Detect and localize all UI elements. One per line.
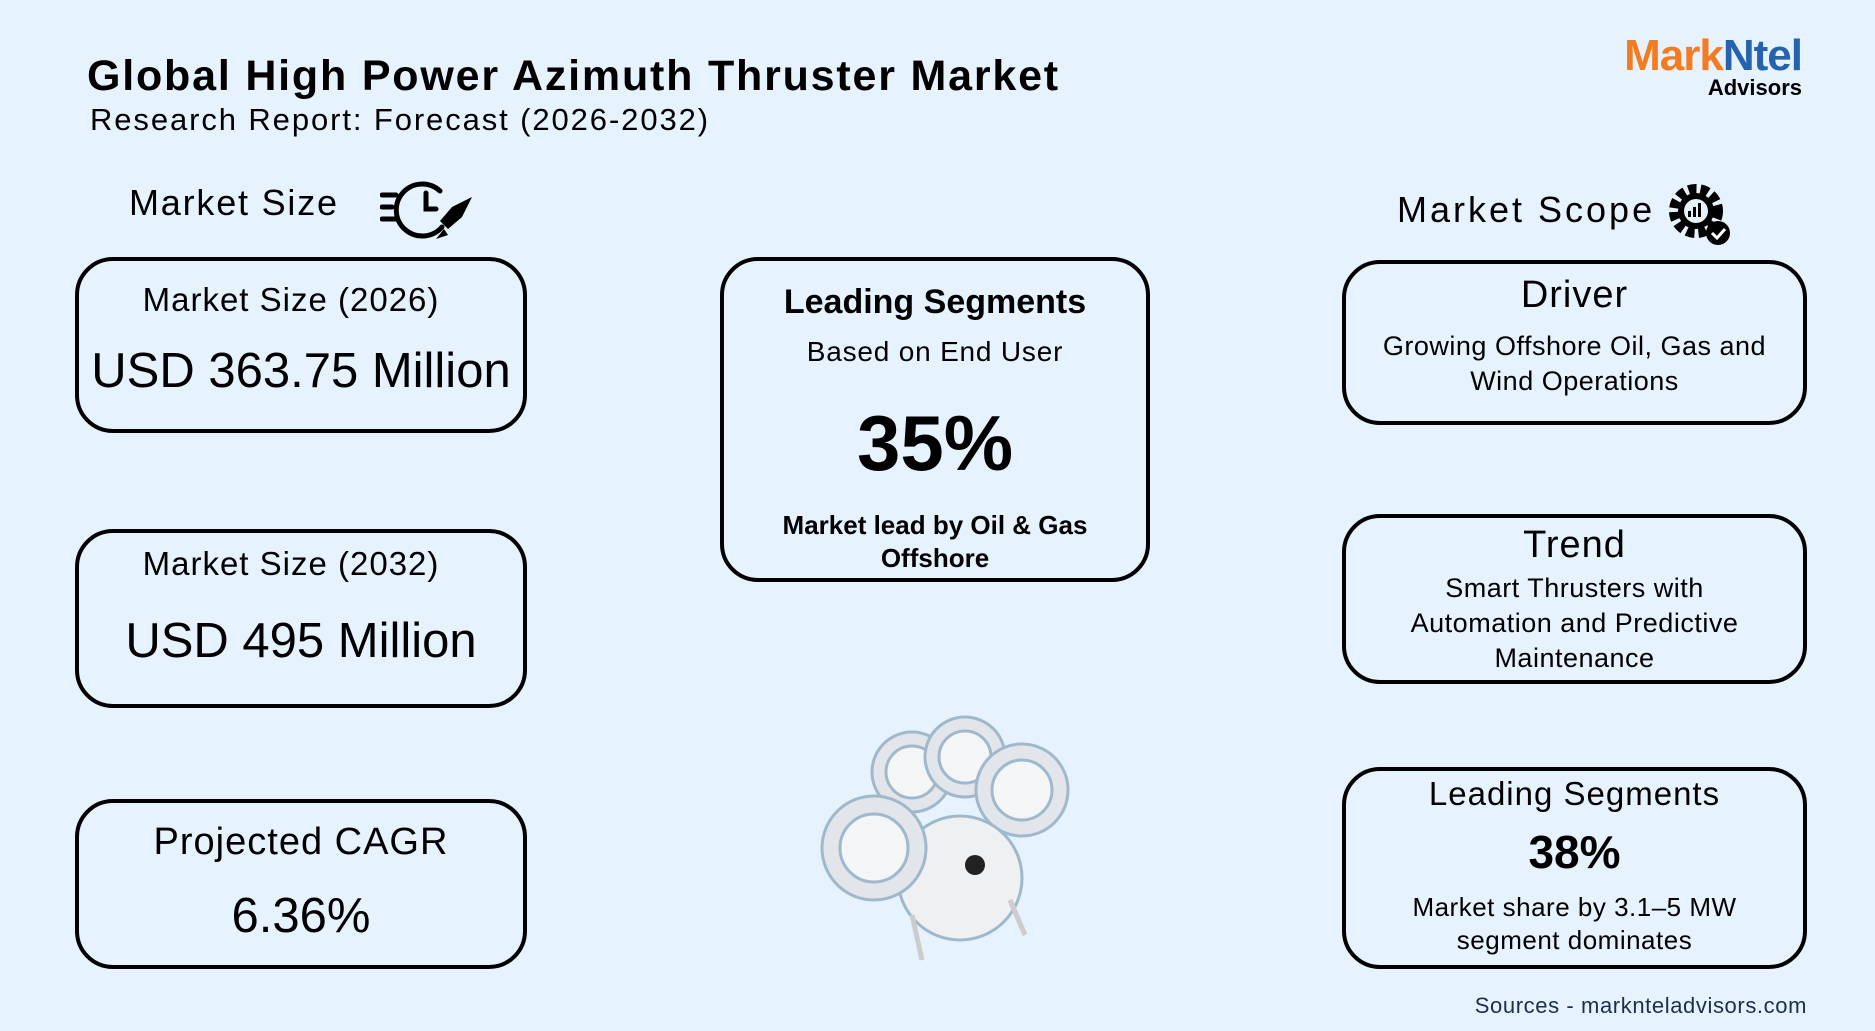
panel: trend: [1342, 514, 1807, 684]
panel: projected CAGR: 6.36%: [232, 889, 370, 943]
panel: leading segments right: Market share by 3.1–5 MW: [1412, 892, 1737, 922]
illustration: thruster: [820, 716, 1070, 960]
logo: MarkNtel: [1624, 31, 1802, 80]
panel: leading segments right: Leading Segments: [1429, 775, 1720, 812]
panel: leading segments right: 38%: [1528, 826, 1621, 878]
panel: market size 2026: USD 363.75 Million: [91, 344, 511, 398]
panel: market size 2032: [75, 529, 527, 708]
logo: Advisors: [1708, 75, 1802, 100]
panel: trend: Automation and Predictive: [1411, 608, 1738, 638]
panel: leading segments center: Based on End User: [807, 336, 1063, 367]
panel: leading segments right: [1342, 767, 1807, 969]
panel: trend: Smart Thrusters with: [1445, 573, 1704, 603]
panel: market size 2026: Market Size (2026): [143, 281, 439, 318]
panel: driver: [1342, 260, 1807, 425]
title: Global High Power Azimuth Thruster Market: [87, 52, 1060, 100]
panel: trend: Trend: [1523, 524, 1626, 566]
panel: leading segments center: [720, 257, 1150, 582]
panel: market size 2032: USD 495 Million: [125, 614, 477, 668]
panel: trend: Maintenance: [1494, 643, 1655, 673]
sources: Sources - marknteladvisors.com: [1475, 993, 1807, 1018]
panel: leading segments center: Offshore: [881, 543, 989, 573]
panel: leading segments center: Leading Segments: [784, 283, 1086, 321]
panel: market size 2032: Market Size (2032): [143, 545, 439, 582]
subtitle: Research Report: Forecast (2026-2032): [90, 102, 710, 137]
panel: leading segments center: 35%: [857, 399, 1013, 487]
panel: driver: Growing Offshore Oil, Gas and: [1383, 331, 1766, 361]
heading: market size: Market Size: [129, 182, 339, 223]
panel: driver: Driver: [1521, 274, 1628, 316]
panel: market size 2026: [75, 257, 527, 433]
panel: driver: Wind Operations: [1470, 366, 1679, 396]
icon: clock rocket: [380, 182, 472, 239]
panel: projected CAGR: [75, 799, 527, 969]
panel: projected CAGR: Projected CAGR: [154, 821, 448, 863]
icon: gear chart check: [1669, 184, 1730, 245]
panel: leading segments right: segment dominates: [1457, 925, 1692, 955]
panel: leading segments center: Market lead by Oil & Gas: [783, 510, 1087, 540]
heading: market scope: Market Scope: [1397, 189, 1655, 230]
